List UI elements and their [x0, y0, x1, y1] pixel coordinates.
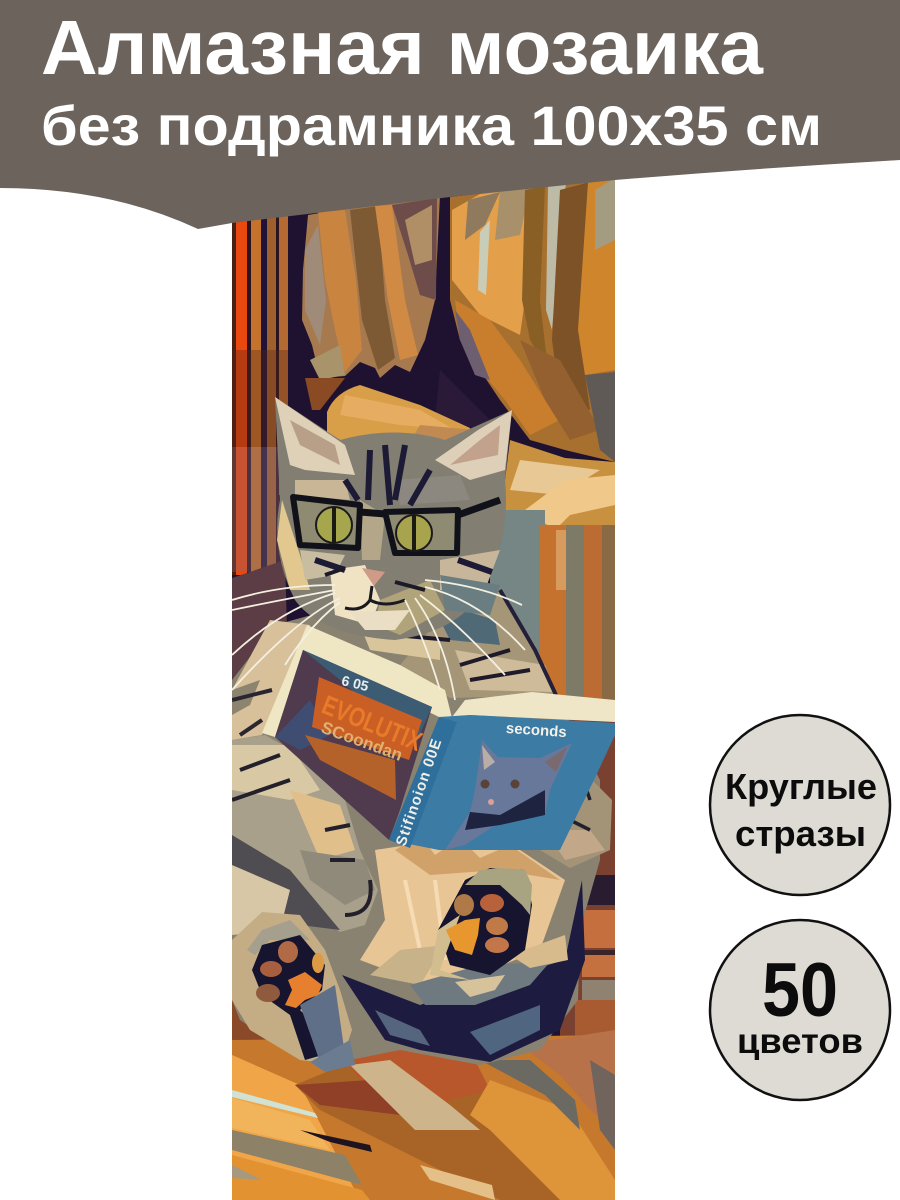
cat portrait on cover	[445, 740, 572, 850]
book: EVOLUTIX	[318, 690, 426, 757]
nose	[362, 568, 385, 586]
middle curtain	[302, 195, 440, 410]
right paw on book	[540, 782, 612, 868]
right lower sofa	[560, 720, 615, 1036]
right cover	[389, 715, 615, 850]
subheading: без подрамника 100х35 см	[41, 94, 822, 157]
left sofa arm	[232, 562, 287, 680]
left ear	[275, 397, 355, 475]
right hind foot	[430, 868, 532, 980]
left page edge	[262, 625, 452, 737]
book	[262, 625, 615, 850]
book: 6 05	[340, 672, 371, 694]
chin	[358, 610, 410, 630]
dark hind body	[342, 880, 585, 1062]
badge: round rhinestones: стразы	[735, 813, 866, 854]
badge: round rhinestones: Круглые	[725, 766, 877, 807]
cat left shoulder	[232, 620, 310, 740]
forehead stripes	[315, 445, 492, 572]
cat body	[232, 590, 600, 1065]
blanket	[232, 1000, 615, 1200]
badge: 50 colours: цветов	[737, 1022, 863, 1061]
cover title block	[312, 677, 422, 760]
heading: Алмазная мозаика	[41, 5, 764, 91]
painting: cat reading a book	[232, 170, 615, 1200]
left hind foot	[232, 912, 355, 1072]
right ear	[435, 410, 512, 480]
badge: round rhinestones	[710, 715, 890, 895]
sofa back stripes	[490, 510, 615, 700]
head	[275, 397, 512, 640]
cheek and forehead patches	[277, 500, 310, 590]
book: SCoondan	[319, 718, 405, 765]
right pages	[452, 692, 615, 722]
whiskers	[232, 580, 525, 700]
glasses	[293, 497, 360, 548]
book: Stifinoion 00E	[393, 737, 445, 848]
sofa cushion	[327, 385, 615, 540]
cat chest fur	[400, 590, 556, 698]
badge: 50 colours: 50	[762, 948, 838, 1033]
header banner	[0, 0, 900, 229]
book: seconds	[505, 720, 567, 741]
left striped curtain	[232, 215, 288, 575]
left cover	[275, 650, 432, 840]
right curtain	[435, 178, 615, 462]
badge: 50 colours	[710, 920, 890, 1100]
cream belly	[360, 840, 565, 990]
left arm	[232, 735, 378, 935]
